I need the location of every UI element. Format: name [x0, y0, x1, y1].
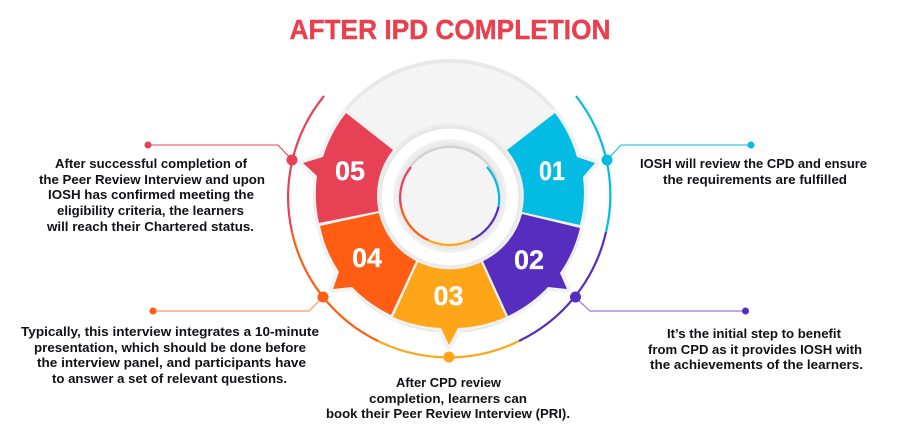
callout connector 04: [150, 292, 328, 314]
text: step 02: from CPD as it provides IOSH with: [648, 343, 862, 357]
outer colour arc: [288, 96, 610, 357]
text: step 05: IOSH has confirmed meeting the: [48, 188, 254, 202]
title: AFTER IPD COMPLETION: [290, 14, 610, 45]
text: step 05: will reach their Chartered status.: [46, 220, 254, 234]
callout dot 03: [444, 352, 454, 362]
segment 02: 02: [514, 245, 544, 275]
text: step 03: After CPD review: [396, 376, 501, 390]
text: step 02: the achievements of the learners.: [650, 358, 863, 372]
segment 03: 03: [433, 281, 464, 311]
text: step 02: It’s the initial step to benefit: [667, 327, 842, 341]
outer disk: [313, 59, 587, 333]
segment 02: [483, 214, 580, 316]
text: step 04: the interview panel, and participants have: [37, 356, 306, 370]
segment 01: [507, 113, 595, 225]
text: step 04: [21, 325, 319, 386]
text: step 01: IOSH will review the CPD and ensure: [640, 157, 867, 171]
text: step 04: Typically, this interview integrates a 10-minute: [21, 325, 319, 339]
text: step 02: [648, 327, 863, 372]
segment 05: 05: [335, 156, 365, 186]
callout connector 01: [602, 142, 754, 166]
inner colour ring: [400, 167, 499, 245]
segment 04: 04: [352, 243, 382, 273]
text: step 05: eligibility criteria, the learners: [57, 204, 244, 218]
text: step 05: the Peer Review Interview and upon: [39, 173, 265, 187]
text: step 05: After successful completion of: [55, 157, 248, 171]
callout connector 05: [144, 142, 298, 166]
callout connector 02: [570, 292, 749, 314]
text: step 04: to answer a set of relevant questions.: [52, 372, 287, 386]
text: step 04: presentation, which should be done before: [34, 341, 306, 355]
text: step 03: [326, 376, 570, 421]
segment 03: [393, 262, 506, 345]
text: step 01: the requirements are fulfilled: [663, 173, 847, 187]
text: step 03: completion, learners can: [369, 392, 527, 406]
centre hub: [377, 123, 523, 269]
text: step 03: book their Peer Review Interview (PRI).: [326, 407, 570, 421]
segment halo: [303, 113, 595, 345]
segment 01: 01: [539, 156, 565, 186]
segment 05: [303, 113, 393, 223]
text: step 01: [640, 157, 867, 187]
text: step 05: [39, 157, 265, 234]
segment 04: [320, 213, 416, 315]
